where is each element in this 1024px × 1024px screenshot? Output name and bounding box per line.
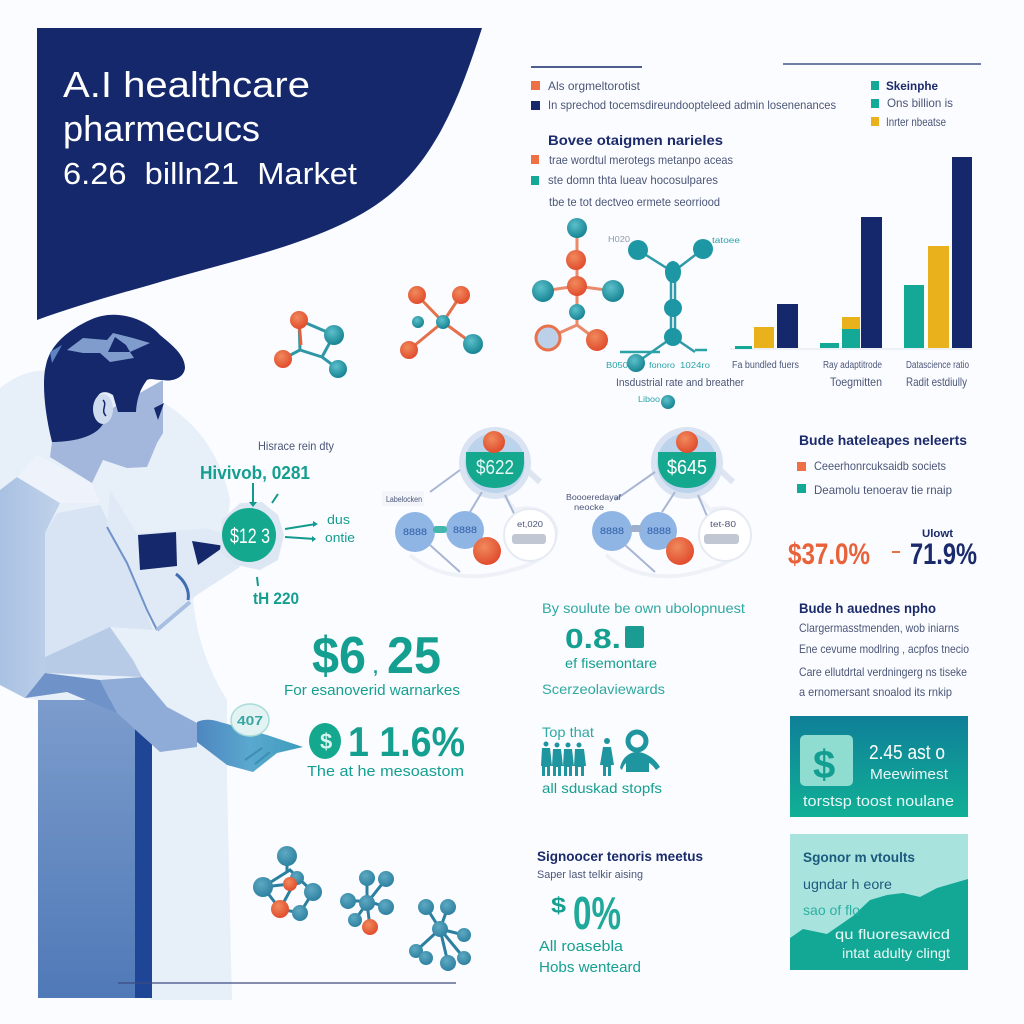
network diagram 1: 8888 [403, 527, 427, 537]
stat: market value [284, 627, 460, 699]
panel: teal investment card: torstsp toost noulane [803, 793, 954, 810]
axis labels: Ray adaptitrode [823, 360, 882, 371]
hand holding tablet [197, 720, 303, 772]
panel: mountain growth card [790, 834, 968, 970]
stat: market value: , [373, 657, 378, 677]
stat: growth percentage: The at he mesoastom [307, 763, 464, 780]
icon: large molecule Y shape: tatoee [712, 236, 741, 245]
text block: teal headline stats: Scerzeolaviewards [542, 681, 665, 697]
icon: bottom molecule cluster [340, 870, 394, 935]
callout note: dus: dus [327, 512, 351, 527]
bars: group 1 [735, 304, 798, 349]
stat: percentage comparison: Ulowt [922, 528, 953, 540]
stat: market value: $6 [312, 627, 366, 685]
text block: right column notes: Ene cevume modlring , acpfos tnecio [799, 642, 969, 656]
stat: growth percentage: 1 1.6% [348, 718, 465, 765]
legend: chart series: Skeinphe [886, 79, 938, 93]
text block: teal headline stats: ef fisemontare [565, 655, 657, 671]
network diagram 1: Labelocken [386, 495, 422, 504]
stat: growth percentage [307, 718, 465, 780]
icon: large molecule Y shape: 1024ro [680, 361, 711, 370]
legend: chart series: Inrter nbeatse [886, 115, 946, 129]
title: market figure: 6.26 billn21 Market [63, 156, 357, 191]
icon: large molecule Y shape: B050 [606, 361, 629, 370]
panel: right column legend: Bude hateleapes neleerts [799, 432, 967, 448]
icon group: people [541, 724, 662, 796]
panel: teal investment card [790, 716, 968, 817]
icon: dark panel held in hand [138, 532, 177, 570]
axis labels: Radit estdiully [906, 375, 967, 389]
network diagram 1: et,020 [517, 520, 544, 529]
text block: right column notes: Care ellutdrtal verdningerg ns tiseke [799, 665, 967, 679]
network diagram 2: neocke [574, 503, 605, 512]
icon group: people: Top that [542, 724, 594, 740]
network diagram 2: $645 [667, 457, 707, 479]
stat: bottom percent: 0% [573, 887, 621, 939]
panel: right column legend: Ceeerhonrcuksaidb societs [814, 459, 946, 473]
stat: bottom percent: Signoocer tenoris meetus [537, 848, 703, 864]
icon: large molecule Y shape: Insdustrial rate and breather [616, 377, 744, 389]
text block: right column notes: a ernomersant snoalod its rnkip [799, 685, 952, 699]
panel: teal investment card: Meewimest [870, 766, 949, 783]
panel: teal investment card: 2.45 ast o [869, 742, 945, 764]
icon: small clipboard [625, 626, 644, 648]
stat: market value: 25 [387, 627, 441, 685]
text block: market notes: Bovee otaigmen narieles [548, 132, 723, 148]
network diagram 2: 8888 [600, 526, 624, 536]
panel: mountain growth card: sao of flo [803, 902, 860, 918]
stat: bottom percent: Saper last telkir aising [537, 869, 643, 881]
icon: molecule orange teal square [274, 311, 347, 378]
legend: chart series [871, 79, 953, 129]
icon: ear [93, 394, 113, 424]
legend: chart series: Ons billion is [887, 96, 953, 110]
text block: market notes: tbe te tot dectveo ermete seorriood [549, 195, 720, 209]
text block: teal headline stats: By soulute be own ubolopnuest [542, 600, 745, 616]
bar chart [730, 157, 972, 389]
callout heading: Hisrace rein dty [258, 439, 334, 453]
text block: right column notes: Clargermasstmenden, wob iniarns [799, 621, 959, 635]
callout: teal value node: $12 3 [230, 525, 270, 548]
network diagram 2: 8888 [647, 526, 671, 536]
stat: percentage comparison: 71.9% [910, 538, 977, 571]
top rules [531, 66, 642, 68]
axis labels [732, 360, 969, 389]
text block: teal headline stats [542, 600, 745, 697]
text block: teal headline stats: 0.8. [565, 623, 621, 654]
text block: market notes [531, 132, 733, 209]
bars: group 2 [820, 217, 882, 348]
callout: teal value node [200, 439, 355, 608]
icon: dollar tile [800, 735, 853, 787]
callout footer value: tH 220 [253, 589, 299, 608]
axis labels: Fa bundled fuers [732, 360, 799, 371]
legend: left list [531, 79, 836, 112]
network diagram 2: Boooeredayaf [566, 493, 622, 502]
icon group: people: all sduskad stopfs [542, 780, 662, 796]
network diagram 2: tet-80 [710, 520, 737, 529]
stat: percentage comparison [788, 528, 977, 571]
legend: left list: Als orgmeltorotist [548, 79, 641, 93]
hair [44, 315, 185, 442]
stat: bottom percent: All roasebla [539, 938, 624, 955]
axis labels: Toegmitten [830, 375, 882, 389]
icon: bottom molecule ring [253, 846, 322, 921]
stat: bottom percent: Hobs wenteard [539, 959, 641, 976]
text block: market notes: trae wordtul merotegs metanpo aceas [549, 153, 733, 167]
panel: mountain growth card: intat adulty clingt [842, 945, 950, 961]
bottom rule [118, 982, 456, 984]
stat: growth percentage: $ [320, 729, 332, 754]
network diagram 2 [566, 427, 751, 576]
floating value bubble [231, 704, 269, 736]
title: line 2: pharmecucs [63, 108, 260, 149]
callout value: Hivivob, 0281 [200, 463, 310, 483]
icon: large molecule Y shape [606, 235, 744, 409]
icon: dollar tile: $ [813, 743, 835, 787]
network diagram 1: $622 [476, 457, 514, 479]
icon: bottom molecule star [409, 899, 471, 971]
panel: mountain growth card: Sgonor m vtoults [803, 849, 915, 865]
icon: large molecule left [532, 218, 624, 351]
floating value bubble: 407 [237, 713, 263, 728]
panel: right column legend: Deamolu tenoerav tie rnaip [814, 483, 952, 497]
text block: right column notes [799, 600, 969, 699]
icon: large molecule Y shape: fonoro [649, 361, 676, 370]
illustration: scientist figure [0, 315, 303, 1000]
text block: market notes: ste domn thta lueav hocosulpares [548, 173, 718, 187]
network diagram 1: 8888 [453, 525, 477, 535]
panel: right column legend [797, 432, 967, 497]
stat: bottom percent [537, 848, 703, 976]
stat: percentage comparison: $37.0% [788, 538, 870, 571]
title: line 1: A.I healthcare [63, 64, 310, 105]
legend: left list: In sprechod tocemsdireundoopteleed admin losenenances [548, 98, 836, 112]
stat: bottom percent: $ [551, 893, 566, 918]
title banner [37, 28, 482, 320]
bars: group 3 [904, 157, 972, 348]
panel: mountain growth card: qu fluoresawicd [835, 926, 950, 942]
stat: market value: For esanoverid warnarkes [284, 682, 460, 699]
text block: right column notes: Bude h auednes npho [799, 600, 936, 616]
icon: large molecule Y shape: H020 [608, 235, 631, 244]
icon: large molecule Y shape: Liboo [638, 395, 661, 404]
axis labels: Datascience ratio [906, 360, 969, 371]
network diagram 1 [382, 427, 556, 576]
panel: mountain growth card: ugndar h eore [803, 876, 892, 892]
callout note: ontie: ontie [325, 530, 355, 545]
icon: molecule cross [400, 286, 483, 359]
